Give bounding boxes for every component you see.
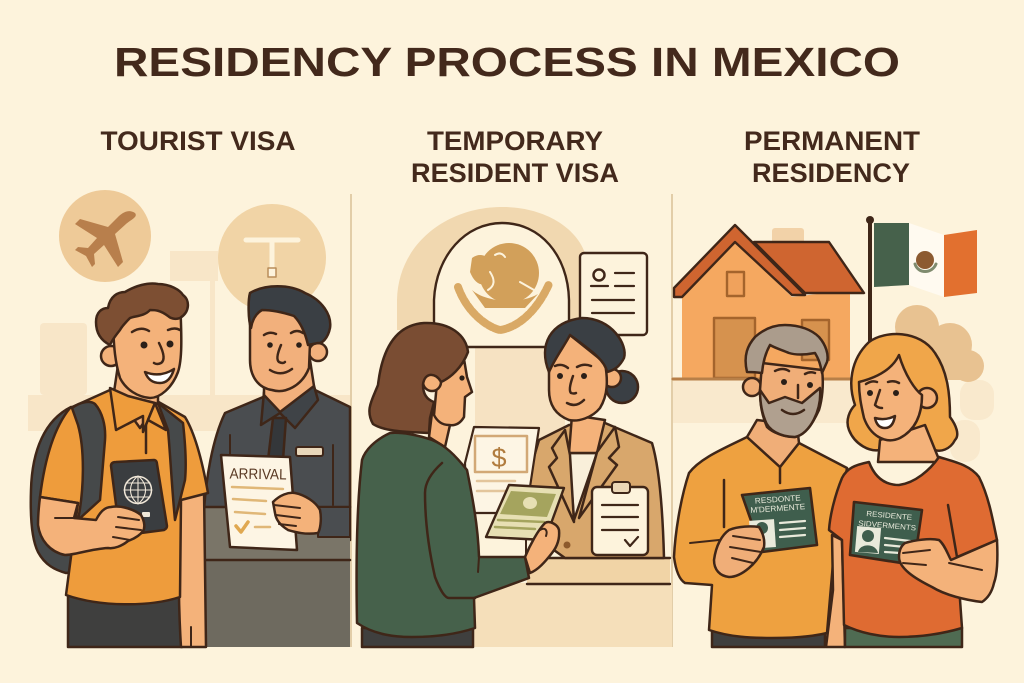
heading: permanent residency [744,126,921,188]
applicant [357,323,529,647]
panel: tourist visa [28,190,350,647]
heading: temporary resident visa: RESIDENT VISA [411,158,619,188]
right arm [179,488,206,647]
flagpole [866,216,874,345]
residency card: man: RESDONTE [755,493,801,506]
applicant hand [525,522,559,573]
officer [204,286,350,540]
icon: airplane [59,190,151,282]
residency card: man [742,488,817,552]
woman [826,334,997,647]
form label: ARRIVAL [229,466,287,483]
hair [96,283,188,345]
document with dollar [465,427,539,557]
panel: permanent residency [673,216,997,647]
background ground [673,380,994,462]
trousers [68,596,182,647]
counter [474,558,672,647]
icon: mexican coat of arms [458,243,549,330]
heading: temporary resident visa [411,126,619,188]
polo shirt [40,390,208,604]
clipboard [592,482,648,555]
heading: tourist visa: TOURIST VISA [100,126,296,156]
heading: permanent residency: PERMANENT [744,126,921,156]
forearm and hand [38,497,144,555]
man [674,325,847,647]
residency card: woman [850,502,922,565]
collar [110,388,155,432]
panel: temporary resident visa [357,207,672,647]
clerk [525,318,664,558]
residency card: woman: SIDVERMENTS [858,518,916,533]
house [673,225,864,379]
man hand [690,526,764,577]
counter [204,507,350,647]
residency card: man: M'DERMENTE [750,502,806,515]
neck and face [114,365,158,428]
banknote [486,485,564,540]
arrival form [221,455,297,550]
arched window [434,223,569,347]
background bush [895,305,984,382]
background buildings [28,251,350,431]
mexican flag [874,223,977,297]
officer sleeve [318,507,350,537]
dollar sign: $ [491,443,507,473]
residency card: woman: RESIDENTE [866,509,913,522]
heading: temporary resident visa: TEMPORARY [427,126,603,156]
officer hand [273,493,321,534]
title: RESIDENCY PROCESS IN MEXICO [114,39,900,85]
backpack [31,407,90,573]
document card [580,253,647,335]
icon: sign circle [218,204,326,312]
passport [111,460,167,533]
heading: permanent residency: RESIDENCY [752,158,910,188]
woman hand and arm [899,539,997,602]
background arch [397,207,585,330]
tourist [31,283,208,647]
